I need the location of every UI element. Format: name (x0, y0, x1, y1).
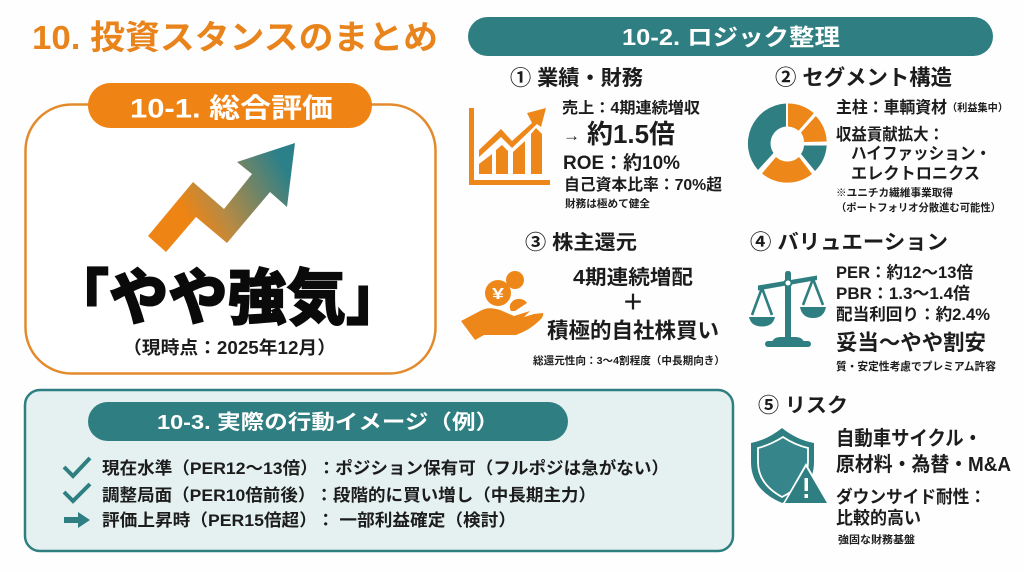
row: re-rating: 評価上昇時（PER15倍超）： 一部利益確定（検討） (102, 511, 516, 530)
heading: 10-2 logic (468, 17, 993, 56)
text: note: 財務は極めて健全 (565, 197, 651, 210)
text: relatively high: 比較的高い (836, 508, 921, 528)
icon: check 1 (64, 458, 90, 476)
text: downside: ダウンサイド耐性： (836, 487, 986, 507)
heading: ⑤ リスク (758, 394, 848, 417)
text: main pillar: 主柱：車輌資材 (836, 98, 947, 117)
text: equity ratio: 自己資本比率：70%超 (564, 175, 722, 194)
text: expansion: 収益貢献拡大： (836, 124, 944, 144)
text: premium note: 質・安定性考慮でプレミアム許容 (836, 359, 996, 373)
text: profit note: （利益集中） (947, 101, 1008, 114)
text: strong base: 強固な財務基盤 (838, 533, 916, 546)
icon: shield with warning (751, 428, 830, 505)
text: verdict: 妥当〜やや割安 (836, 331, 986, 355)
text: 1.5x: 約1.5倍 (587, 119, 675, 149)
heading: ① 業績・財務 (510, 67, 643, 90)
panel: 10-3 action image (25, 390, 733, 551)
text: dividends: 4期連続増配 (573, 265, 693, 289)
text: electronics: エレクトロニクス (851, 164, 980, 183)
text: ROE: ROE：約10% (563, 152, 680, 174)
icon: rising arrow (148, 143, 295, 252)
text: sales: 売上：4期連続増収 (562, 98, 701, 117)
heading: 10-3 (88, 402, 568, 441)
panel: 3 shareholder returns (461, 231, 725, 367)
icon: donut chart (748, 104, 827, 183)
icon: hand with yen coins (461, 271, 543, 340)
heading: 10-3: 10-3. 実際の行動イメージ（例） (157, 411, 499, 434)
heading: ② セグメント構造 (775, 65, 952, 90)
panel: 1 earnings and finance (469, 67, 722, 210)
text: acquisition note: ※ユニチカ繊維事業取得 (836, 186, 954, 199)
text: 1.5x: → (563, 126, 580, 145)
text: PER: PER：約12〜13倍 (836, 263, 973, 282)
heading: ④ バリュエーション (750, 231, 948, 254)
title: 10. 投資スタンスのまとめ (32, 20, 438, 57)
panel: 2 segment structure (748, 65, 1008, 214)
heading: 10-2 logic: 10-2. ロジック整理 (622, 24, 840, 50)
rating text: 「やや強気」 (50, 264, 405, 332)
text: PBR: PBR：1.3〜1.4倍 (836, 284, 971, 303)
icon: hand with yen coins: ¥ (492, 286, 504, 303)
icon: scales (749, 271, 826, 347)
text: portfolio note: （ポートフォリオ分散進む可能性） (836, 201, 1001, 214)
panel: 5 risk (751, 394, 1011, 546)
icon: growth chart (469, 108, 550, 185)
heading: ③ 株主還元 (525, 231, 637, 254)
panel: 10-1 overall rating (26, 83, 436, 374)
plus sign: ＋ (622, 290, 644, 315)
row: current level: 現在水準（PER12〜13倍）：ポジション保有可（フルポジは急がない） (102, 458, 669, 478)
text: cycle: 自動車サイクル・ (836, 427, 982, 450)
text: high fashion: ハイファッション・ (851, 145, 991, 163)
date note: （現時点：2025年12月） (123, 337, 336, 358)
icon: check 2 (64, 484, 90, 501)
icon: arrow (64, 512, 90, 528)
text: buybacks: 積極的自社株買い (547, 319, 719, 343)
heading: 10-1: 10-1. 総合評価 (130, 94, 333, 124)
text: payout note: 総還元性向：3〜4割程度（中長期向き） (533, 354, 725, 367)
row: correction: 調整局面（PER10倍前後）：段階的に買い増し（中長期主力） (102, 485, 596, 505)
panel: 4 valuation (749, 231, 996, 373)
text: yield: 配当利回り：約2.4% (836, 305, 990, 324)
text: materials: 原材料・為替・M&A (836, 453, 1011, 476)
heading: 10-1 (88, 83, 372, 128)
